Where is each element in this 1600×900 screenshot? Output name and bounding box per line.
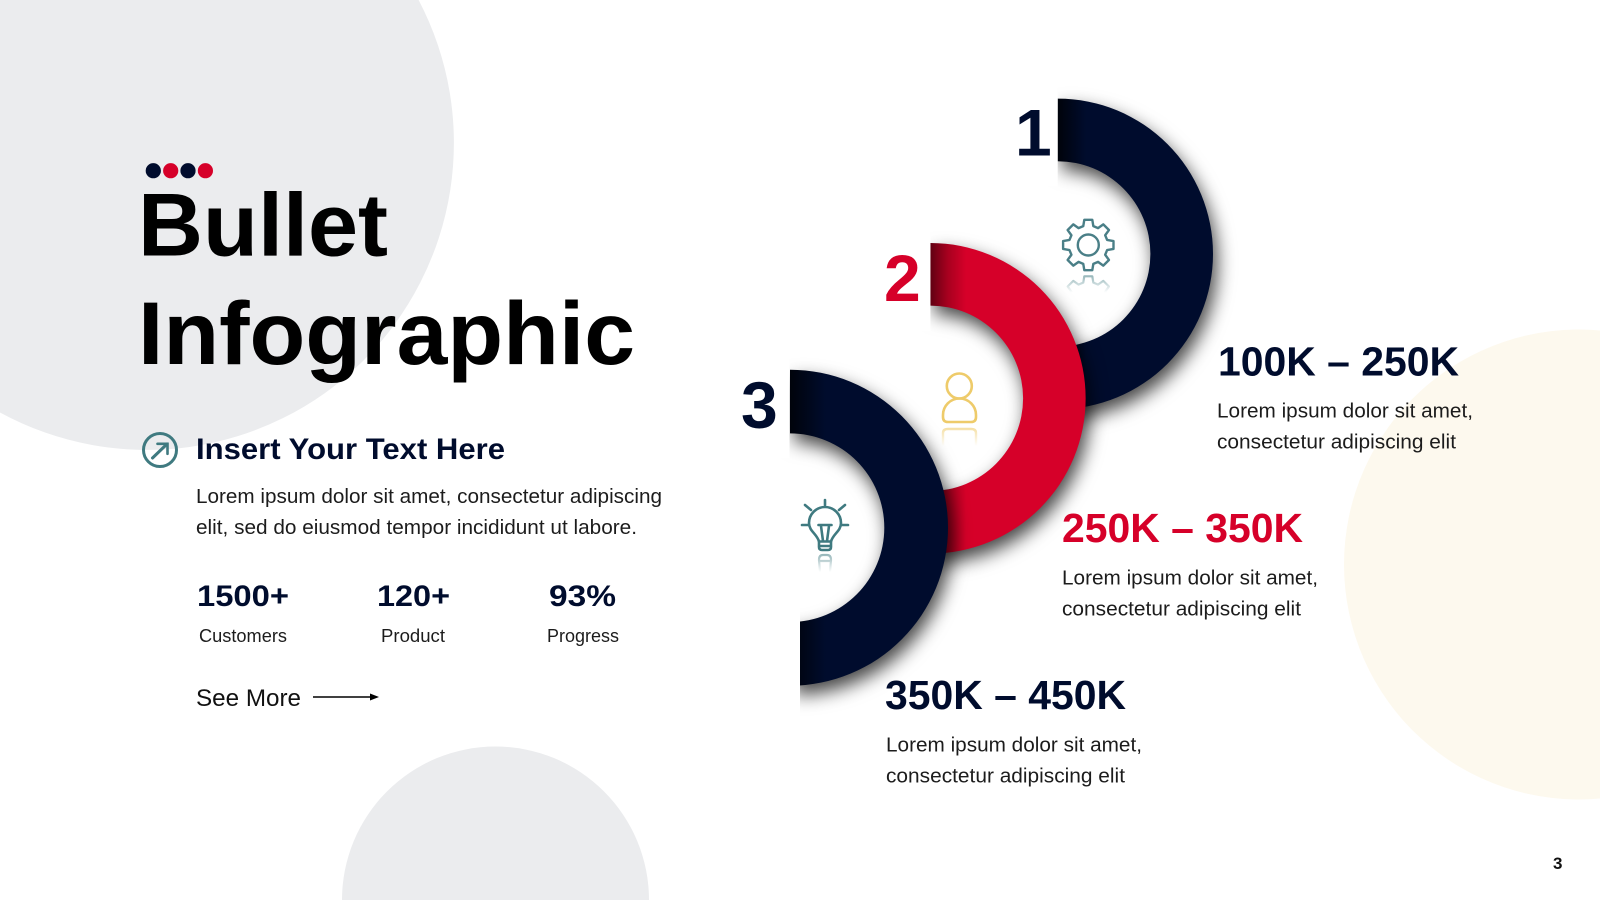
title bbox=[138, 174, 635, 383]
icon: person reflection bbox=[943, 429, 976, 446]
stat: progress: Progress bbox=[547, 626, 619, 646]
stat: product: Product bbox=[381, 626, 445, 646]
number 3: 3 bbox=[741, 368, 778, 442]
ring 3 navy bbox=[735, 340, 948, 740]
number 1: 1 bbox=[1015, 96, 1052, 170]
stat: customers: Customers bbox=[199, 626, 287, 646]
body text: Lorem ipsum dolor sit amet, consectetur adipiscing bbox=[196, 485, 662, 508]
see more link: See More bbox=[196, 685, 301, 712]
icon: person bbox=[943, 374, 976, 422]
label 2: consectetur adipiscing elit bbox=[1062, 598, 1301, 620]
background circle: bottom bbox=[342, 746, 649, 900]
stat: product: 120+ bbox=[377, 580, 450, 613]
page number: 3 bbox=[1553, 854, 1562, 873]
icon: gear reflection bbox=[1063, 276, 1113, 327]
background circle: right cream bbox=[1344, 329, 1600, 800]
body text bbox=[196, 485, 662, 539]
label 2: Lorem ipsum dolor sit amet, bbox=[1062, 566, 1318, 590]
subheading: Insert Your Text Here bbox=[196, 433, 505, 466]
label 3: consectetur adipiscing elit bbox=[886, 764, 1125, 788]
label 1: consectetur adipiscing elit bbox=[1217, 430, 1456, 454]
icon: gear bbox=[1063, 220, 1113, 270]
label 3 bbox=[885, 672, 1142, 788]
title: Bullet bbox=[138, 174, 388, 274]
label 1 bbox=[1217, 338, 1473, 454]
icon: arrow in circle bbox=[144, 434, 176, 466]
stat: progress: 93% bbox=[549, 580, 616, 613]
ring 1 navy bbox=[1000, 70, 1213, 409]
body text: elit, sed do eiusmod tempor incididunt ut labore. bbox=[196, 516, 637, 539]
ring 2 red bbox=[875, 215, 1086, 554]
label 2 bbox=[1062, 505, 1318, 620]
stat: progress bbox=[547, 580, 619, 646]
decorative dots bbox=[146, 163, 213, 178]
stat: product bbox=[377, 580, 450, 646]
label 1: Lorem ipsum dolor sit amet, bbox=[1217, 400, 1473, 422]
background circle: top left bbox=[0, 0, 454, 450]
label 2: 250K – 350K bbox=[1062, 505, 1303, 551]
stat: customers bbox=[197, 580, 289, 646]
title: Infographic bbox=[138, 283, 635, 383]
arrow: see more bbox=[313, 694, 379, 700]
label 3: 350K – 450K bbox=[885, 672, 1126, 718]
stat: customers: 1500+ bbox=[197, 580, 289, 613]
label 1: 100K – 250K bbox=[1218, 338, 1459, 384]
icon: light bulb bbox=[802, 500, 848, 550]
icon: light bulb reflection bbox=[819, 555, 831, 572]
label 3: Lorem ipsum dolor sit amet, bbox=[886, 734, 1142, 756]
number 2: 2 bbox=[884, 241, 921, 315]
